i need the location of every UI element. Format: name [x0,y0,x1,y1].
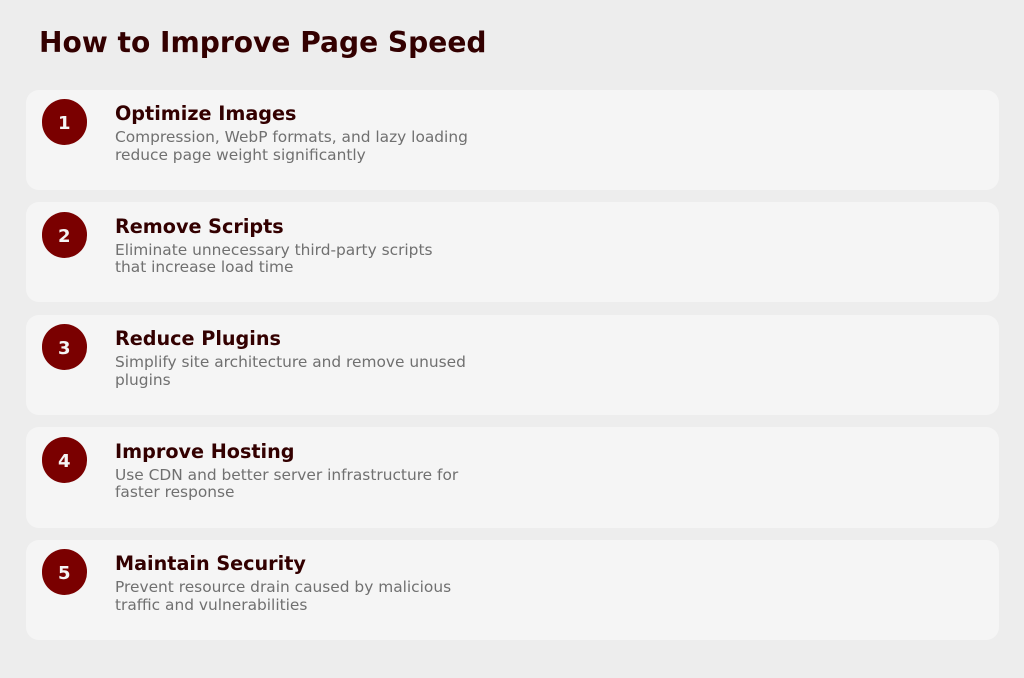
icon: number 5: 5 [58,563,71,584]
icon: number 4 [42,437,87,483]
panel: step 4 [26,427,999,528]
icon: number 5 [42,549,87,595]
text: step 1 description [115,128,468,164]
icon: number 1: 1 [58,113,71,134]
panel: step 3 [26,315,999,415]
text: step 4 description: faster response [115,483,234,501]
icon: number 1 [42,99,87,145]
text: step 5 description: Prevent resource drain caused by malicious [115,578,451,596]
panel: step 5 [26,540,999,640]
text: step 3 description: plugins [115,370,171,388]
heading: step 3: Reduce Plugins [115,327,281,350]
text: step 2 description: that increase load time [115,258,293,276]
text: step 3 description: Simplify site architecture and remove unused [115,353,466,371]
title: How to Improve Page Speed [39,26,486,59]
text: step 4 description: Use CDN and better server infrastructure for [115,466,458,484]
heading: step 4: Improve Hosting [115,440,295,463]
icon: number 2 [42,212,87,258]
text: step 2 description: Eliminate unnecessary third-party scripts [115,241,432,259]
heading: step 2: Remove Scripts [115,215,284,238]
icon: number 4: 4 [58,451,71,472]
text: step 4 description [115,466,458,501]
text: step 2 description [115,241,432,276]
heading: step 5: Maintain Security [115,552,306,575]
icon: number 3: 3 [58,338,71,359]
text: step 1 description: reduce page weight significantly [115,146,366,164]
text: step 3 description [115,353,466,388]
panel: step 2 [26,202,999,302]
text: step 5 description [115,578,451,614]
heading: step 1: Optimize Images [115,102,296,125]
panel: step 1 [26,90,999,190]
text: step 5 description: traffic and vulnerabilities [115,596,307,614]
icon: number 2: 2 [58,226,71,247]
text: step 1 description: Compression, WebP formats, and lazy loading [115,128,468,146]
icon: number 3 [42,324,87,370]
